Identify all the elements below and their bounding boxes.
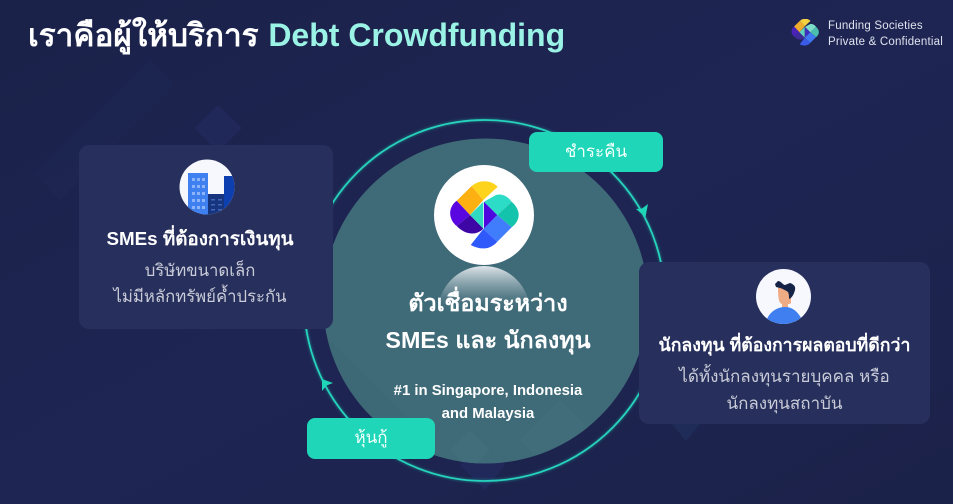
SMEs heading: SMEs ที่ต้องการเงินทุน xyxy=(106,228,294,249)
ring xyxy=(304,120,665,481)
icon: person xyxy=(756,269,811,324)
arrow: clockwise top right xyxy=(636,204,648,217)
central heading: SMEs และ นักลงทุน xyxy=(385,327,591,353)
chip: debentures: หุ้นกู้ xyxy=(354,428,388,447)
chip: repayment: ชำระคืน xyxy=(565,142,627,161)
brand text: Funding Societies xyxy=(828,20,923,32)
central note: and Malaysia xyxy=(442,406,534,422)
investors heading: นักลงทุน ที่ต้องการผลตอบที่ดีกว่า xyxy=(659,335,910,355)
icon: buildings xyxy=(180,160,234,214)
investors description: ได้ทั้งนักลงทุนรายบุคคล หรือ xyxy=(679,367,890,386)
panel: investors xyxy=(639,262,930,424)
central heading xyxy=(385,286,591,354)
SMEs description: ไม่มีหลักทรัพย์ค้ำประกัน xyxy=(113,287,287,306)
central note: #1 in Singapore, Indonesia xyxy=(394,383,582,399)
title: เราคือผู้ให้บริการ Debt Crowdfunding xyxy=(28,17,565,53)
investors description: นักลงทุนสถาบัน xyxy=(726,394,843,413)
central note xyxy=(394,383,582,422)
brand logo small xyxy=(792,19,819,46)
central logo xyxy=(434,165,534,265)
SMEs description xyxy=(112,260,287,306)
arrow: clockwise lower left xyxy=(322,379,333,391)
investors description xyxy=(678,364,890,414)
panel: SMEs xyxy=(79,145,333,329)
brand text: Private & Confidential xyxy=(828,36,943,48)
background with ring and central circle xyxy=(304,117,700,490)
chip: debentures xyxy=(307,418,435,459)
brand text xyxy=(828,20,943,48)
SMEs description: บริษัทขนาดเล็ก xyxy=(145,261,255,280)
central heading: ตัวเชื่อมระหว่าง xyxy=(408,290,568,316)
chip: repayment xyxy=(529,132,663,172)
central circle xyxy=(326,138,644,464)
